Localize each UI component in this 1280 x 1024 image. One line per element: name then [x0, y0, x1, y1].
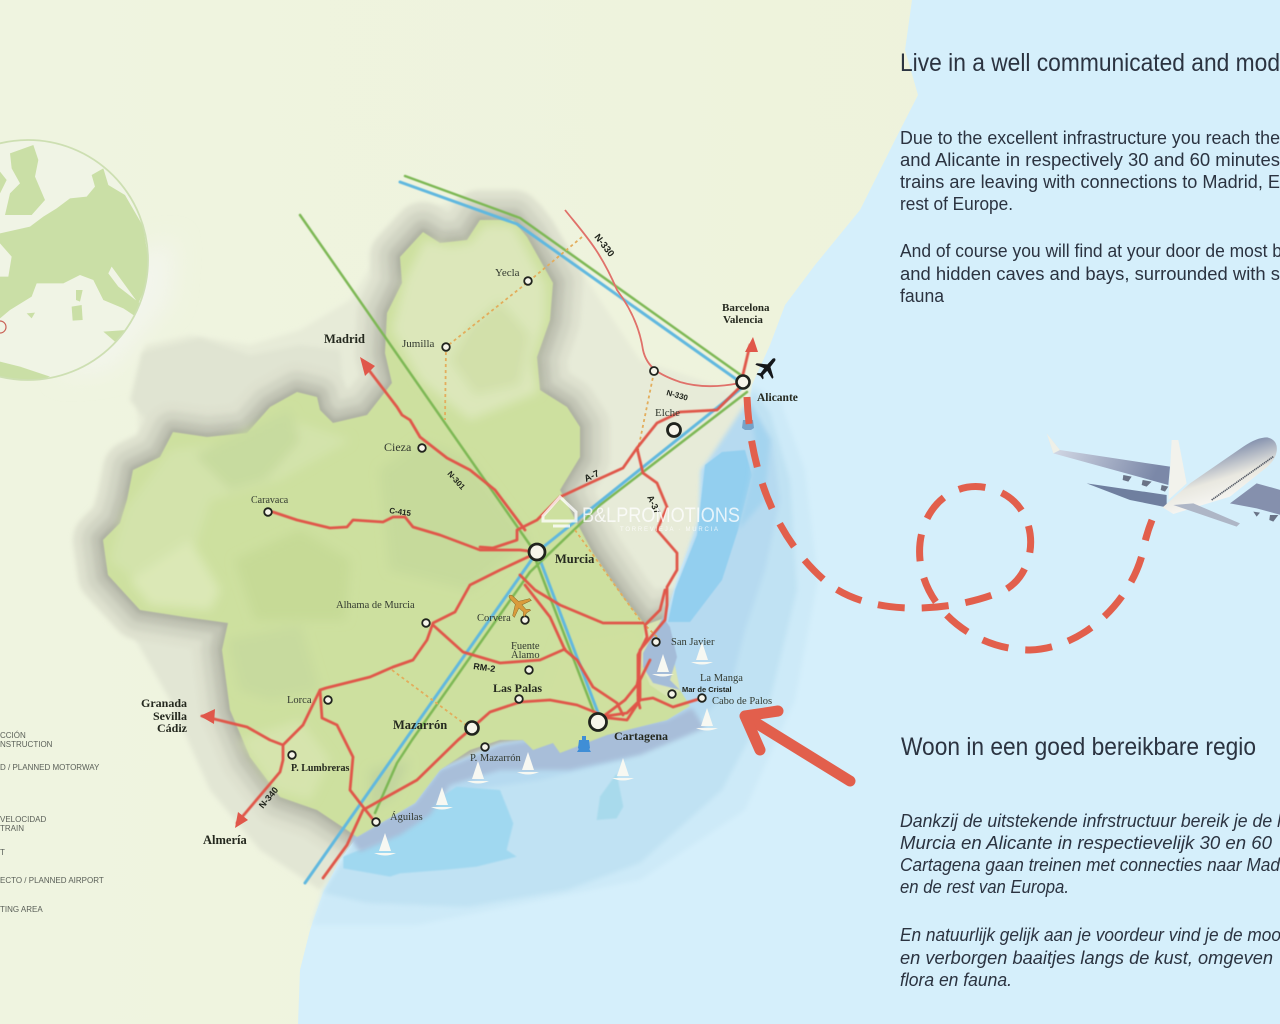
rail and high speed lines — [300, 176, 747, 883]
icon: ship Alicante — [742, 420, 754, 430]
place names: Águilas — [390, 811, 423, 823]
text block: Dutch body: en de rest van Europa. — [900, 876, 1069, 897]
Europe landmass — [0, 168, 148, 318]
text block: English body: trains are leaving with connections to Madrid, E — [900, 171, 1280, 192]
road arrowheads — [200, 337, 758, 828]
legend fragments: TING AREA — [0, 905, 43, 914]
place names: La Manga — [700, 673, 743, 684]
text block: English body — [900, 127, 1280, 306]
pale highlights near the globe — [60, 240, 175, 375]
place names: Yecla — [495, 267, 520, 279]
watermark logo: B&LPROMOTIONS — [582, 504, 740, 527]
place names: Cabo de Palos — [712, 696, 772, 707]
globe inset — [0, 140, 148, 387]
text block: English body: fauna — [900, 285, 945, 306]
icon: orange plane Corvera — [501, 587, 536, 622]
place names: San Javier — [671, 637, 715, 648]
arrow pointing to Cabo de Palos — [745, 711, 850, 781]
bay water north — [668, 450, 752, 622]
Mar Menor lagoon — [643, 617, 680, 690]
text block: Dutch body: en verborgen baaitjes langs de kust, omgeven — [900, 947, 1273, 968]
text block: Dutch body — [900, 810, 1280, 990]
place names: Granada — [141, 696, 187, 710]
place names: Cieza — [384, 440, 412, 454]
panel: region of Murcia — [103, 220, 690, 837]
text block: English body: and Alicante in respectively 30 and 60 minutes — [900, 149, 1280, 170]
place names: Barcelona — [722, 302, 770, 314]
road labels — [257, 232, 689, 810]
place names: Caravaca — [251, 495, 289, 506]
text block: Dutch body: Murcia en Alicante in respectievelijk 30 en 60 — [900, 832, 1273, 853]
coastal shallow water — [312, 385, 818, 925]
legend fragments: D / PLANNED MOTORWAY — [0, 763, 100, 772]
place names: Valencia — [723, 314, 763, 326]
watermark logo: TORREVIEJA · MURCIA — [620, 527, 718, 533]
legend fragments: ECTO / PLANNED AIRPORT — [0, 876, 104, 885]
text block: English body: rest of Europe. — [900, 193, 1013, 214]
place names: Cartagena — [614, 729, 668, 743]
terrain shadow around the region — [100, 195, 745, 890]
road labels: A-7 — [583, 468, 601, 485]
place names: Corvera — [477, 613, 511, 624]
city nodes — [264, 277, 750, 826]
text block: Dutch body: flora en fauna. — [900, 969, 1012, 990]
icon: ship Cartagena — [577, 736, 591, 752]
place names: Almería — [203, 833, 247, 847]
icon: airplane photo — [1047, 433, 1280, 527]
place names: Lorca — [287, 695, 312, 706]
place names: Murcia — [555, 552, 595, 566]
road labels: A-37 — [645, 494, 662, 516]
place names: Alicante — [757, 392, 798, 404]
place names: Mar de Cristal — [682, 685, 732, 694]
road network — [202, 345, 750, 878]
legend fragments — [0, 731, 104, 914]
place names: Sevilla — [153, 709, 187, 723]
legend fragments: VELOCIDAD — [0, 815, 46, 824]
road labels: N-330 — [592, 232, 616, 259]
sea — [298, 0, 1280, 1024]
sailboats — [374, 642, 718, 856]
cyan patch south — [343, 773, 623, 877]
legend fragments: CCIÓN — [0, 731, 26, 740]
place names: Álamo — [511, 649, 540, 661]
place names: P. Lumbreras — [291, 763, 349, 774]
place names: Mazarrón — [393, 718, 447, 732]
road labels: N-301 — [446, 469, 467, 492]
planned roads dotted — [392, 237, 660, 728]
legend fragments: NSTRUCTION — [0, 740, 53, 749]
dashed flight route — [747, 397, 1152, 650]
place names: Cádiz — [157, 721, 188, 735]
globe outline — [0, 140, 148, 380]
place names: Madrid — [324, 332, 365, 346]
place names: Jumilla — [402, 338, 435, 350]
legend fragments: TRAIN — [0, 824, 24, 833]
text block: Dutch heading: Woon in een goed bereikbare regio — [901, 733, 1256, 761]
grey-blue coastal band — [350, 708, 705, 852]
road labels: N-330 — [665, 388, 689, 403]
road labels: C-415 — [389, 506, 412, 518]
icon: black plane Alicante — [751, 351, 783, 384]
watermark logo — [543, 497, 740, 533]
place names: Fuente — [511, 641, 540, 652]
national road N-330 — [565, 210, 740, 386]
place names: Elche — [655, 407, 680, 419]
place names: P. Mazarrón — [470, 753, 521, 764]
place names: Alhama de Murcia — [336, 600, 415, 611]
place names: Las Palas — [493, 681, 542, 695]
legend fragments: T — [0, 848, 5, 857]
text block: English body: and hidden caves and bays, surrounded with s — [900, 263, 1280, 284]
road labels: RM-2 — [473, 661, 496, 674]
road labels: N-340 — [257, 785, 280, 810]
place names — [141, 267, 798, 847]
